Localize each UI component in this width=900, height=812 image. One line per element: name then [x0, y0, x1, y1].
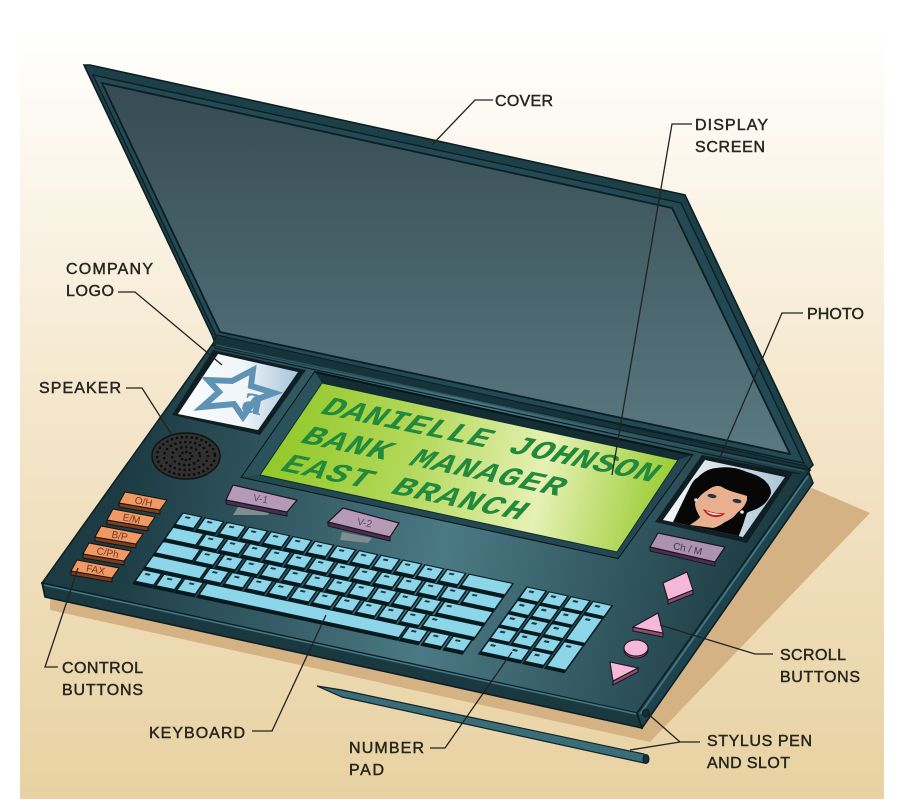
- label: keyboard: KEYBOARD: [149, 725, 245, 742]
- label: photo: PHOTO: [807, 306, 864, 323]
- display text: [271, 394, 668, 528]
- label: stylus pen and slot: STYLUS PEN: [707, 733, 812, 750]
- company logo: [172, 350, 306, 435]
- display screen: [242, 372, 692, 558]
- label: cover: COVER: [495, 93, 553, 110]
- logo star: a: [238, 376, 268, 425]
- label: display screen: [612, 117, 768, 475]
- label: company logo: [66, 261, 222, 365]
- label: control buttons: CONTROL: [62, 660, 143, 677]
- display text: DANIELLE JOHNSON: [311, 394, 668, 490]
- control buttons: FAX: [85, 563, 106, 578]
- label: display screen: SCREEN: [695, 139, 765, 156]
- portrait: [670, 467, 771, 538]
- label: company logo: COMPANY: [66, 261, 153, 278]
- scroll circle: [624, 640, 648, 658]
- keyboard: [133, 513, 513, 654]
- label: stylus pen and slot: [630, 712, 812, 772]
- label: scroll buttons: SCROLL: [780, 647, 846, 664]
- base: [42, 335, 813, 728]
- V-1 button: V-1: [252, 493, 269, 507]
- V-1 button: [226, 485, 297, 516]
- label: number pad: [349, 652, 512, 779]
- display text: BANK MANAGER: [291, 423, 576, 504]
- label: display screen: DISPLAY: [695, 117, 768, 134]
- control buttons: E/M: [122, 512, 141, 527]
- label: number pad: NUMBER: [349, 740, 424, 757]
- label: scroll buttons: BUTTONS: [780, 669, 860, 686]
- device: [42, 65, 813, 728]
- V-2 button: [328, 508, 399, 543]
- label: photo: [718, 306, 864, 462]
- label: control buttons: BUTTONS: [62, 682, 143, 699]
- cast shadow: [50, 488, 870, 742]
- label: cover: [432, 93, 553, 145]
- label: speaker: SPEAKER: [39, 380, 121, 397]
- display-side inner panel: [102, 83, 790, 454]
- label: company logo: LOGO: [66, 283, 114, 300]
- label: speaker: [39, 380, 172, 435]
- control buttons: C/Ph: [96, 546, 119, 561]
- control buttons: [71, 492, 167, 582]
- control buttons: O/H: [134, 495, 153, 510]
- photo: [655, 455, 793, 543]
- scroll right triangle: [610, 662, 638, 685]
- display text: EAST BRANCH: [271, 451, 536, 528]
- Ch/M button: Ch / M: [672, 541, 703, 558]
- V-2 button: V-2: [356, 517, 373, 531]
- label: scroll buttons: [660, 625, 860, 686]
- number pad: [479, 587, 612, 673]
- label: number pad: PAD: [349, 762, 384, 779]
- speaker: [152, 433, 220, 479]
- label: control buttons: [45, 568, 143, 699]
- label: stylus pen and slot: AND SLOT: [707, 755, 790, 772]
- control buttons: B/P: [111, 530, 129, 544]
- scroll left triangle: [633, 613, 663, 637]
- stylus pen: [317, 686, 649, 764]
- cover: [84, 65, 813, 472]
- label: keyboard: [149, 615, 326, 742]
- scroll up diamond: [663, 572, 693, 604]
- scroll buttons: [610, 572, 693, 685]
- Ch/M button: [650, 533, 725, 566]
